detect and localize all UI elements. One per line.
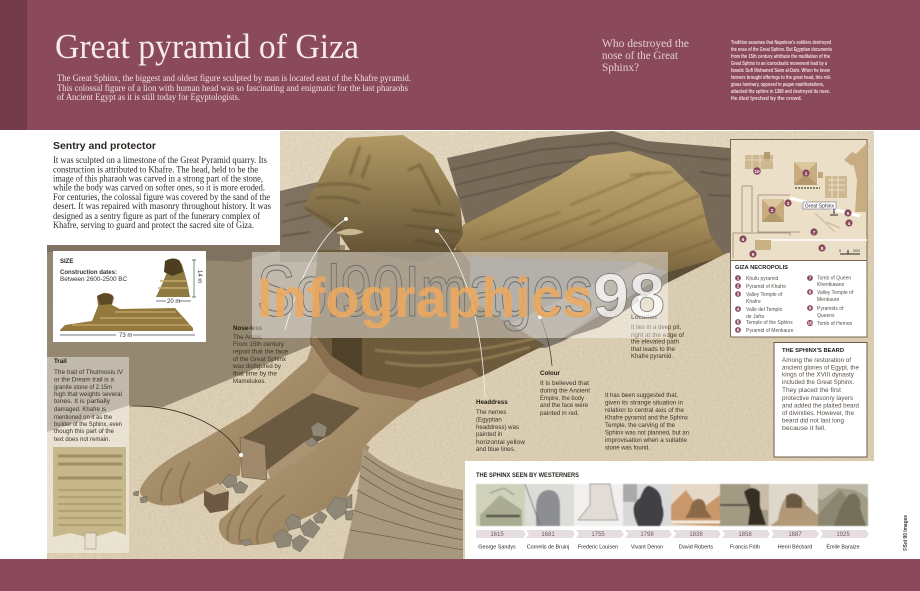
timeline years: 1858 xyxy=(738,532,752,538)
trail text xyxy=(54,369,124,443)
panel: Giza necropolis map: 4 xyxy=(848,221,851,226)
annotation: sphinx origin: Temple, the carving of the xyxy=(605,422,676,429)
beard text: because it fell. xyxy=(782,425,826,432)
annotation: headdress: and blue lines. xyxy=(476,446,516,453)
beard text: of divinities. However, the xyxy=(782,410,855,417)
sentry body text: while the body was carved on softer ones, so it is more eroded. xyxy=(53,182,265,192)
historic image thumbnails xyxy=(476,484,868,526)
panel: Giza necropolis map: 9 xyxy=(752,252,755,257)
intro text: This colossal figure of a lion with human head was so fascinating and enigmatic for the last pharaohs xyxy=(57,83,408,94)
necropolis legend: 4 xyxy=(737,307,740,312)
annotation: colour: painted in red. xyxy=(540,410,579,417)
annotation: colour xyxy=(540,370,590,417)
necropolis legend: Pyramid of Khafre xyxy=(746,284,786,290)
panel: Giza necropolis map xyxy=(730,140,867,337)
panel: Giza necropolis map: 10 xyxy=(754,169,760,174)
necropolis legend: Khentkawes xyxy=(817,282,845,288)
annotation: nose-less: Mamelukes. xyxy=(233,378,266,385)
nose question text: attacked the sphinx in 1389 and destroyed its nose. xyxy=(731,89,830,95)
nose question heading: nose of the Great xyxy=(602,48,679,62)
width dimension: 20 m xyxy=(167,299,180,305)
sentry body text: image of this pharaoh was carved in a strong part of the stone, xyxy=(53,174,263,184)
main illustration: Great Sphinx xyxy=(47,130,874,560)
trail text: mentioned on it as the xyxy=(54,414,113,421)
great sphinx label: Great Sphinx xyxy=(805,203,834,209)
length dimension xyxy=(60,333,195,339)
trail text: tones. It is partially xyxy=(54,398,111,405)
trail text: text does not remain. xyxy=(54,436,110,443)
stela xyxy=(240,437,267,480)
annotation: headdress xyxy=(476,399,526,453)
sphinx side view xyxy=(60,293,193,331)
timeline years: 1887 xyxy=(788,532,802,538)
panel: size xyxy=(53,251,206,342)
annotation: sphinx origin: It has been suggested that, xyxy=(605,392,678,399)
necropolis legend: 8 xyxy=(809,290,812,295)
annotation: sphinx origin: improvisation when a suitable xyxy=(605,437,688,444)
necropolis legend: 2 xyxy=(737,284,740,289)
panel: Giza necropolis map: 8 xyxy=(821,246,824,251)
annotation: sphinx origin: given its strange situation in xyxy=(605,400,683,406)
sentry body text: Khafre, serving to guard and protect the sacred site of Giza. xyxy=(53,220,254,230)
trail text: damaged. Khafre is xyxy=(54,406,106,413)
text panel: sentry and protector xyxy=(47,130,280,245)
timeline years: 1838 xyxy=(689,532,703,538)
sentry body text: designed as a sentry figure as part of the funerary complex of xyxy=(53,211,260,221)
trail text: builder of the Sphinx, even xyxy=(54,421,122,428)
watermark outline wordmark: Sol90Images xyxy=(257,252,593,332)
nose question text: He died lynched by the crowd. xyxy=(731,96,803,102)
annotation: headdress: headdress) was xyxy=(476,424,519,431)
necropolis legend: 9 xyxy=(809,306,812,311)
bottom band xyxy=(0,559,920,591)
annotation: location: the elevated path xyxy=(631,338,679,346)
necropolis legend: Pyramid of Menkaure xyxy=(746,328,794,334)
pale distant desert xyxy=(280,130,874,200)
necropolis legend: Menkaure xyxy=(817,297,839,303)
left wall xyxy=(280,178,340,262)
annotation: headdress: (Egyptian xyxy=(476,416,502,424)
necropolis legend: Valley Temple of xyxy=(746,292,783,298)
sentry body text: For centuries, the colossal figure was covered by the sand of the xyxy=(53,192,270,202)
timeline authors: Henri Béchard xyxy=(778,544,812,550)
annotation: nose-less: Nose-less xyxy=(233,325,263,332)
paw toes xyxy=(161,462,285,544)
panel: Giza necropolis map: 5 xyxy=(847,211,850,216)
annotation: nose-less: was disfigured by xyxy=(232,363,282,370)
timeline arrows xyxy=(476,530,869,538)
watermark numerals: 98 xyxy=(593,262,665,331)
timeline years: 1615 xyxy=(490,532,504,538)
nose question text xyxy=(731,40,832,102)
annotation: location xyxy=(631,314,684,360)
annotation: sphinx origin: Khafre pyramid and the Sphinx xyxy=(605,414,688,422)
sentry body text: construction is attributed to Khafre. The head, held to be the xyxy=(53,164,258,174)
panel: the sphinx seen by westerners xyxy=(465,461,874,559)
nose question heading: Who destroyed the xyxy=(602,36,689,50)
beard text: Among the restoration of xyxy=(782,357,851,364)
necropolis legend xyxy=(730,260,867,337)
panel: the sphinx's beard xyxy=(774,342,867,457)
panel: trail xyxy=(47,357,129,553)
scale bar: 0 xyxy=(839,248,842,253)
trench xyxy=(243,393,360,470)
trail text: The trail of Thutmosis IV xyxy=(54,369,124,376)
annotation: nose-less: of the Great Sphinx xyxy=(233,356,286,363)
back wall xyxy=(447,131,730,258)
map number badges xyxy=(739,167,853,258)
intro text: of Ancient Egypt as it is still today for Egyptologists. xyxy=(57,92,240,103)
nose question text: Great Sphinx to an iconoclastic movement lead by a xyxy=(731,61,827,67)
altar xyxy=(204,484,229,513)
height dimension: 14 m xyxy=(196,270,202,283)
annotation: location: Khafre pyramid. xyxy=(631,353,673,360)
panel: Giza necropolis map: 1 xyxy=(805,171,808,176)
trail text: though this part of the xyxy=(54,428,115,435)
necropolis legend: 7 xyxy=(809,276,812,281)
necropolis legend: 5 xyxy=(737,320,740,325)
dream stela image xyxy=(53,447,126,549)
construction dates: Between 2600-2500 BC xyxy=(60,276,128,283)
annotation: location: Location xyxy=(631,314,657,321)
trail text: granite stone of 2.15m xyxy=(54,384,112,391)
annotation: location: right at the edge of xyxy=(631,332,684,339)
timeline heading: THE SPHINX SEEN BY WESTERNERS xyxy=(476,472,579,479)
sphinx head xyxy=(303,135,463,262)
annotation: colour: It is believed that xyxy=(540,380,589,387)
watermark orange wordmark: Infographics xyxy=(257,266,593,329)
trail text: or the Dream trail is a xyxy=(54,376,115,384)
timeline years: 1925 xyxy=(836,532,850,538)
nose question text: gious luminary, opposed to pagan manifestations, xyxy=(731,82,824,88)
scale bar: 200 xyxy=(853,248,860,253)
necropolis legend: Khufu pyramid xyxy=(746,276,778,282)
foreground sand xyxy=(366,252,730,446)
annotation: colour: during the Ancient xyxy=(540,388,590,394)
map terrain xyxy=(733,143,867,258)
panel: Giza necropolis map: 2 xyxy=(771,208,774,213)
beard text: ancient glories of Egypt, the xyxy=(782,364,860,372)
timeline years xyxy=(490,532,850,538)
watermark xyxy=(252,252,668,338)
title: Great pyramid of Giza xyxy=(55,27,359,66)
annotation: headdress: Headdress xyxy=(476,399,508,406)
necropolis legend: Pyramids of xyxy=(817,306,844,312)
annotation: location: It lies in a deep pit, xyxy=(631,324,681,331)
annotation: headdress: The nemes xyxy=(476,409,506,416)
necropolis legend: de Jafra xyxy=(746,314,764,320)
annotation: sphinx origin: stone was found. xyxy=(605,444,650,452)
beard text xyxy=(782,357,860,432)
scale bar xyxy=(839,248,860,254)
height dimension xyxy=(192,260,202,297)
construction dates: Construction dates: xyxy=(60,269,117,276)
annotation: nose-less: report that the face xyxy=(233,348,289,356)
timeline years: 1755 xyxy=(591,532,605,538)
timeline authors: Vivant Denon xyxy=(631,544,663,550)
pyramids xyxy=(762,162,823,222)
nose question heading: Sphinx? xyxy=(602,60,639,74)
pit floor xyxy=(465,256,672,348)
beard text: beard did not last long xyxy=(782,418,844,424)
left paw xyxy=(140,345,330,506)
nose question text: Tradition assumes that Napoleon's soldiers destroyed xyxy=(731,40,831,46)
necropolis legend: Khafre xyxy=(746,299,761,305)
annotation: nose-less: From 15th century xyxy=(233,341,285,348)
annotation: colour: Colour xyxy=(540,370,561,377)
nose question text: the nose of the Great Sphinx. But Egyptian documents xyxy=(731,47,832,53)
annotation: sphinx origin: Sphinx was not planned, but an xyxy=(605,430,689,436)
trail text: high that weights several xyxy=(54,391,122,398)
sphinx front view xyxy=(156,258,190,297)
sentry heading: Sentry and protector xyxy=(53,141,156,152)
great sphinx label xyxy=(803,202,838,215)
necropolis legend: 10 xyxy=(807,321,813,326)
size heading: SIZE xyxy=(60,259,73,265)
rocks xyxy=(133,422,353,552)
timeline years: 1681 xyxy=(541,532,555,538)
sentry body text: It was sculpted on a limestone of the Great Pyramid quarry. Its xyxy=(53,155,267,165)
necropolis legend: 1 xyxy=(737,276,740,281)
timeline years: 1798 xyxy=(640,532,654,538)
necropolis legend: Temple of the Sphinx xyxy=(746,320,793,326)
annotation: colour: and the face were xyxy=(540,402,589,409)
annotation: sphinx origin: relation to central axis of the xyxy=(605,407,685,414)
timeline authors: Cornelis de Bruinj xyxy=(527,544,569,550)
beard text: kings of the XVIII dynasty xyxy=(782,372,855,378)
surface grain xyxy=(47,130,874,560)
intro text: The Great Sphinx, the biggest and oldest figure sculpted by man is located east of the Khafre pyramid. xyxy=(57,73,411,84)
timeline authors: Frederic Louisen xyxy=(578,544,618,550)
sentry body text xyxy=(53,155,271,230)
panel: Giza necropolis map: 6 xyxy=(742,237,745,242)
necropolis legend: Tomb of Hemon xyxy=(817,321,853,327)
annotation: headdress: painted in xyxy=(476,431,502,438)
beard text: and added the plaited beard xyxy=(782,402,859,410)
nose question text: fanatic Sufi Mohamed Saim al-Dahr. When he knew xyxy=(731,68,830,74)
timeline authors: George Sandys xyxy=(478,544,516,550)
nose question text: from the 15th century attribute the mutilation of the xyxy=(731,54,830,60)
length dimension: 73 m xyxy=(119,333,132,339)
width dimension xyxy=(156,299,191,305)
sphinx chest and neck xyxy=(310,250,545,398)
necropolis legend: Queens xyxy=(817,313,835,319)
trail heading: Trail xyxy=(54,358,67,365)
beard text: included the Great Sphinx. xyxy=(782,379,854,386)
necropolis legend: 3 xyxy=(737,292,740,297)
intro text xyxy=(57,73,411,103)
timeline authors: Émile Baraize xyxy=(826,544,860,550)
timeline authors: Francis Frith xyxy=(730,544,760,550)
dark ground left xyxy=(47,245,345,432)
annotation: sphinx origin xyxy=(605,392,689,452)
annotation: location: that leads to the xyxy=(631,346,676,353)
necropolis legend: Valle del Templo xyxy=(746,307,782,313)
nose question heading xyxy=(602,36,689,74)
image credit: ©Sol 90 Images xyxy=(902,515,909,551)
annotation: headdress: horizontal yellow xyxy=(476,439,526,446)
annotation: nose-less: that time by the xyxy=(233,370,278,378)
nose question text: farmers brought offerings to the great head, this reli- xyxy=(731,75,831,81)
sphinx body xyxy=(455,151,725,272)
necropolis legend: GIZA NECROPOLIS xyxy=(735,265,788,271)
annotation: colour: Empire, the body xyxy=(540,395,585,402)
sentry body text: desert. It was repaired with masonry throughout history. It was xyxy=(53,201,271,211)
beard text: They placed the first xyxy=(782,387,841,394)
necropolis legend: Valley Temple of xyxy=(817,290,854,296)
beard text: protective masonry layers xyxy=(782,395,853,402)
rock wall xyxy=(343,447,463,560)
annotation: nose-less: The Arabic xyxy=(233,334,262,341)
necropolis legend: 6 xyxy=(737,328,740,333)
timeline authors: David Roberts xyxy=(679,544,713,550)
panel: Giza necropolis map: 7 xyxy=(813,230,816,235)
necropolis legend: Tomb of Queen xyxy=(817,276,851,282)
callout lines and dots xyxy=(130,217,642,457)
right paw and base band xyxy=(219,372,420,545)
beard heading: THE SPHINX'S BEARD xyxy=(782,348,844,354)
timeline authors xyxy=(478,544,860,550)
header band xyxy=(0,0,920,130)
annotation: nose-less xyxy=(232,325,289,385)
panel: Giza necropolis map: 3 xyxy=(787,201,790,206)
construction dates xyxy=(60,269,128,283)
